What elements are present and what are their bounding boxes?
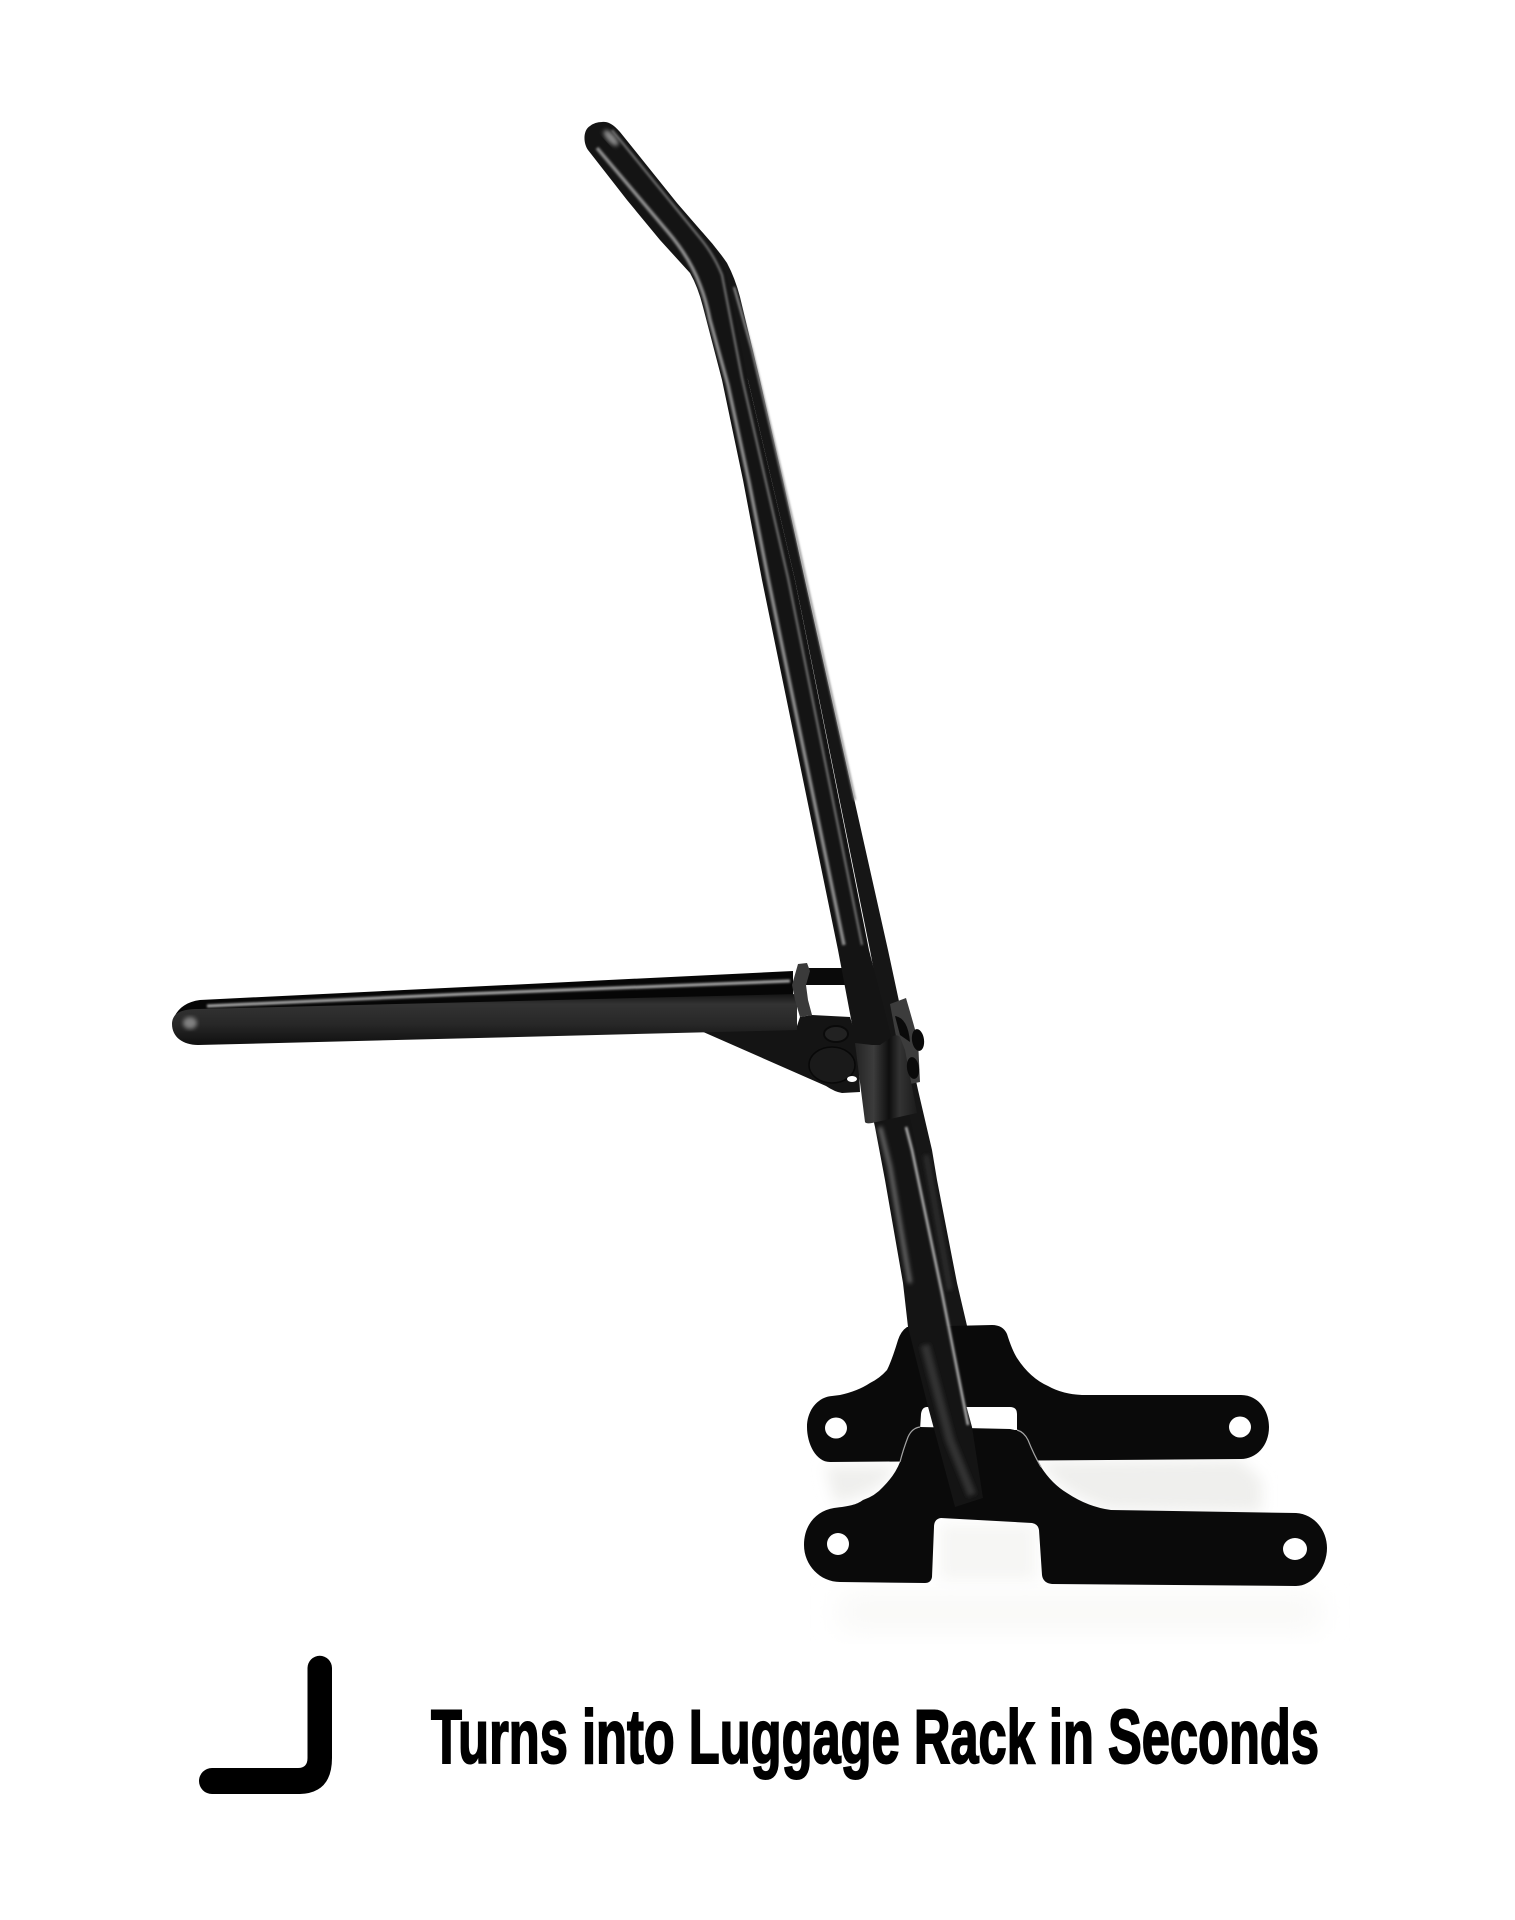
rack rear tube xyxy=(172,971,793,1024)
folding clamp bracket xyxy=(792,963,812,1017)
clamp sleeve on upright xyxy=(855,998,925,1123)
sleeve body xyxy=(855,1035,917,1123)
tube right sheen xyxy=(612,130,862,945)
product: sissy bar backrest with folded luggage rack xyxy=(172,122,1327,1586)
icon: L-shaped rack silhouette xyxy=(199,1656,332,1794)
tube cap highlight xyxy=(601,128,621,148)
rack front tube xyxy=(172,994,797,1045)
plate edge line xyxy=(900,1427,1041,1467)
slot in mount xyxy=(847,1076,857,1082)
rack tube highlight xyxy=(207,981,790,1006)
sleeve bolt upper xyxy=(911,1028,925,1052)
front upright tube xyxy=(584,122,983,1507)
floor shadow xyxy=(825,1460,1320,1628)
pivot knuckle xyxy=(824,1026,848,1042)
clamp recess xyxy=(895,1016,910,1042)
horizontal luggage rack xyxy=(172,963,860,1093)
folding clamp arm xyxy=(806,968,846,985)
rack end highlight xyxy=(183,1017,197,1029)
rear upright tube xyxy=(698,228,968,1330)
rear tube lower sheen xyxy=(926,1155,950,1290)
tube left sheen xyxy=(597,148,844,945)
upper clamp bracket xyxy=(890,998,920,1085)
rear mounting plate xyxy=(807,1325,1269,1462)
lower tube right sheen xyxy=(906,1127,968,1425)
rack mount disc xyxy=(809,1047,855,1083)
sleeve bolt lower xyxy=(906,1056,920,1080)
rear tube sheen xyxy=(734,287,855,800)
tube foot sheen xyxy=(925,1345,972,1495)
rack gusset and folding mechanism xyxy=(701,1015,860,1093)
front mounting plate xyxy=(804,1427,1327,1586)
lower tube left sheen xyxy=(880,1127,910,1283)
